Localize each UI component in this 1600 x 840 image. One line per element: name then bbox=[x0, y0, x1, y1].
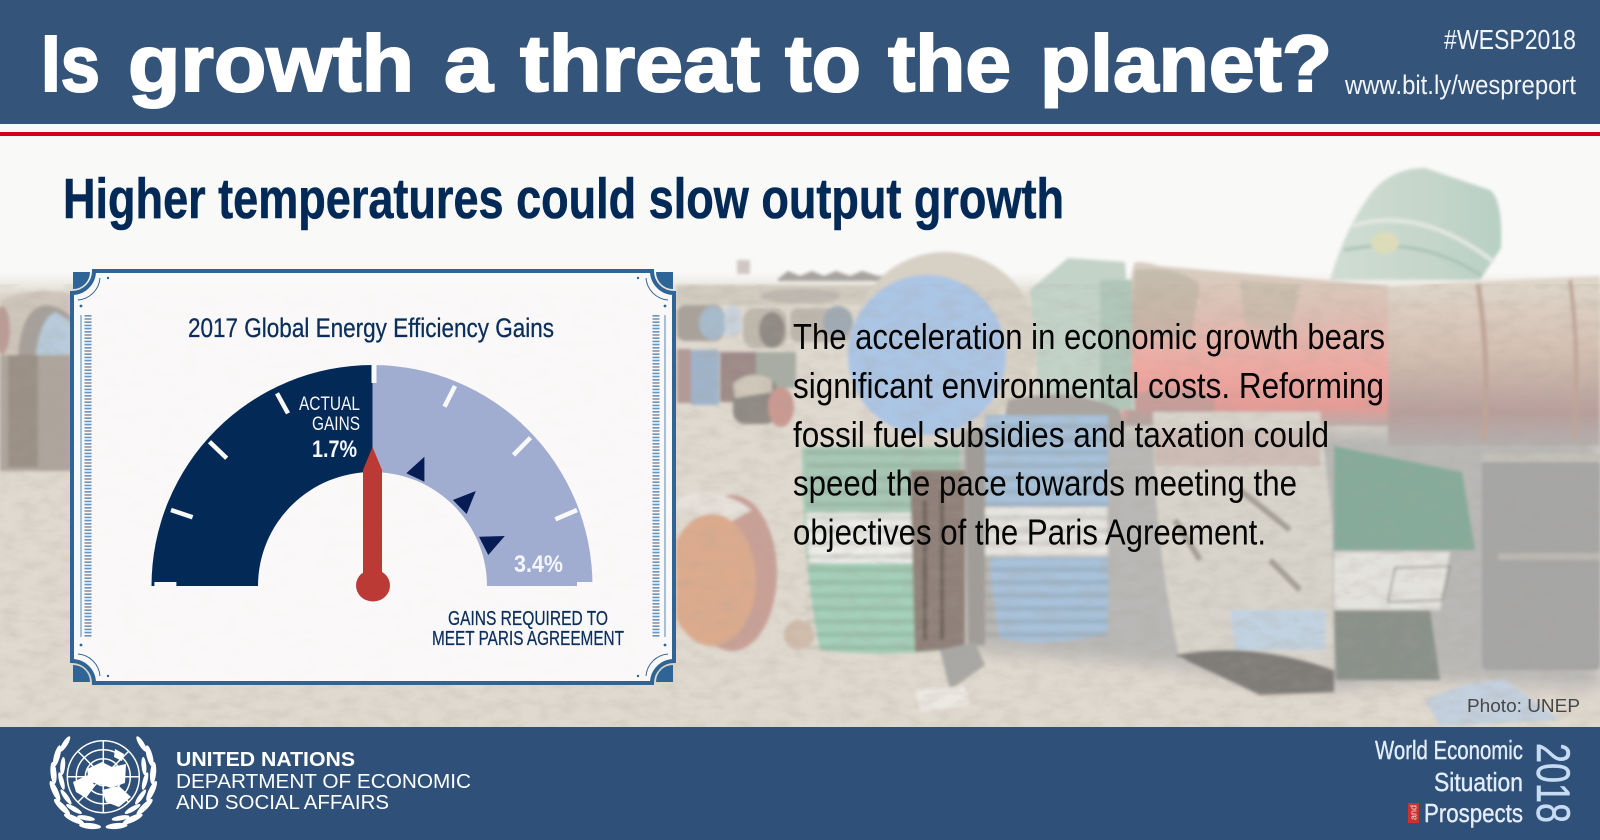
crushed white drum bbox=[1153, 412, 1334, 695]
title: threat bbox=[520, 19, 760, 108]
footer band bbox=[0, 727, 1600, 840]
label: gains required: GAINS REQUIRED TO bbox=[448, 608, 608, 630]
chart title: 2017 Global Energy Efficiency Gains bbox=[188, 313, 554, 343]
body paragraph: fossil fuel subsidies and taxation could bbox=[793, 414, 1329, 455]
label: gains required: MEET PARIS AGREEMENT bbox=[432, 628, 624, 650]
background photo: rusty oil drums bbox=[0, 168, 1600, 727]
label: gains required bbox=[432, 608, 624, 650]
header band bbox=[0, 0, 1600, 124]
UN DESA wordmark bbox=[176, 749, 471, 814]
tan drums on the right bbox=[1388, 276, 1600, 446]
upper blue drum rim and face bbox=[1030, 258, 1135, 410]
section heading: Higher temperatures could slow output growth bbox=[63, 167, 1064, 231]
UN DESA wordmark: UNITED NATIONS bbox=[176, 749, 355, 771]
body paragraph: The acceleration in economic growth bears bbox=[793, 316, 1385, 357]
arrow markers bbox=[406, 457, 505, 555]
panel frame bbox=[72, 271, 674, 683]
gauge chart bbox=[152, 365, 598, 602]
blue tarp bbox=[1425, 680, 1560, 726]
dark drums at right bbox=[1482, 454, 1600, 670]
grey shadow mass behind the lower drums bbox=[960, 430, 1600, 690]
title: planet? bbox=[1040, 19, 1332, 108]
red divider bbox=[0, 132, 1600, 136]
green horizontal drum and label bbox=[1334, 446, 1475, 680]
body paragraph: speed the pace towards meeting the bbox=[793, 462, 1297, 504]
gauge: actual gains arc bbox=[152, 365, 372, 586]
title: growth bbox=[128, 19, 414, 108]
value: 1.7%: 1.7% bbox=[312, 436, 357, 463]
title: a bbox=[444, 19, 494, 108]
label: actual gains: GAINS bbox=[312, 413, 360, 435]
report url: www.bit.ly/wespreport bbox=[1344, 70, 1576, 100]
blue and white drum bbox=[965, 415, 1108, 645]
needle bbox=[356, 447, 390, 602]
hashtag: #WESP2018 bbox=[1444, 24, 1576, 55]
WESP logo: Prospects bbox=[1424, 798, 1523, 828]
title: the bbox=[888, 19, 1011, 108]
green and white drum bbox=[802, 447, 965, 654]
WESP logo bbox=[1375, 735, 1580, 828]
frame stripes bbox=[88, 315, 656, 637]
continents bbox=[73, 749, 131, 807]
tilted green drum at the top bbox=[1330, 168, 1501, 280]
photo credit: Photo: UNEP bbox=[1467, 695, 1580, 716]
body paragraph: significant environmental costs. Reforming bbox=[793, 365, 1384, 406]
frame flourishes bbox=[78, 278, 668, 676]
far field of drums behind text bbox=[676, 260, 946, 427]
far-left drums bbox=[0, 291, 72, 471]
title bbox=[41, 19, 1332, 108]
title: to bbox=[785, 19, 861, 108]
value: 3.4%: 3.4% bbox=[514, 551, 563, 578]
globe bbox=[67, 741, 140, 813]
panel: energy efficiency gauge bbox=[72, 271, 674, 683]
body paragraph: objectives of the Paris Agreement. bbox=[793, 512, 1266, 552]
label: actual gains: ACTUAL bbox=[299, 393, 360, 415]
gauge ticks bbox=[171, 365, 577, 519]
wreath bbox=[48, 735, 159, 830]
label: actual gains bbox=[299, 393, 360, 435]
red "and" tag bbox=[1408, 803, 1419, 823]
icon: UN emblem bbox=[48, 735, 159, 830]
WESP logo: World Economic bbox=[1375, 735, 1523, 765]
WESP logo: Situation bbox=[1434, 767, 1523, 797]
orange drum bbox=[662, 490, 777, 651]
big red drum on its side bbox=[1122, 262, 1390, 426]
UN DESA wordmark: DEPARTMENT OF ECONOMIC bbox=[176, 771, 471, 793]
body paragraph bbox=[793, 316, 1385, 552]
title: Is bbox=[41, 19, 100, 108]
gauge: required gains arc bbox=[372, 365, 592, 586]
red "and" tag: and bbox=[1408, 805, 1418, 820]
UN DESA wordmark: AND SOCIAL AFFAIRS bbox=[176, 792, 389, 814]
frame corners bbox=[73, 272, 673, 682]
